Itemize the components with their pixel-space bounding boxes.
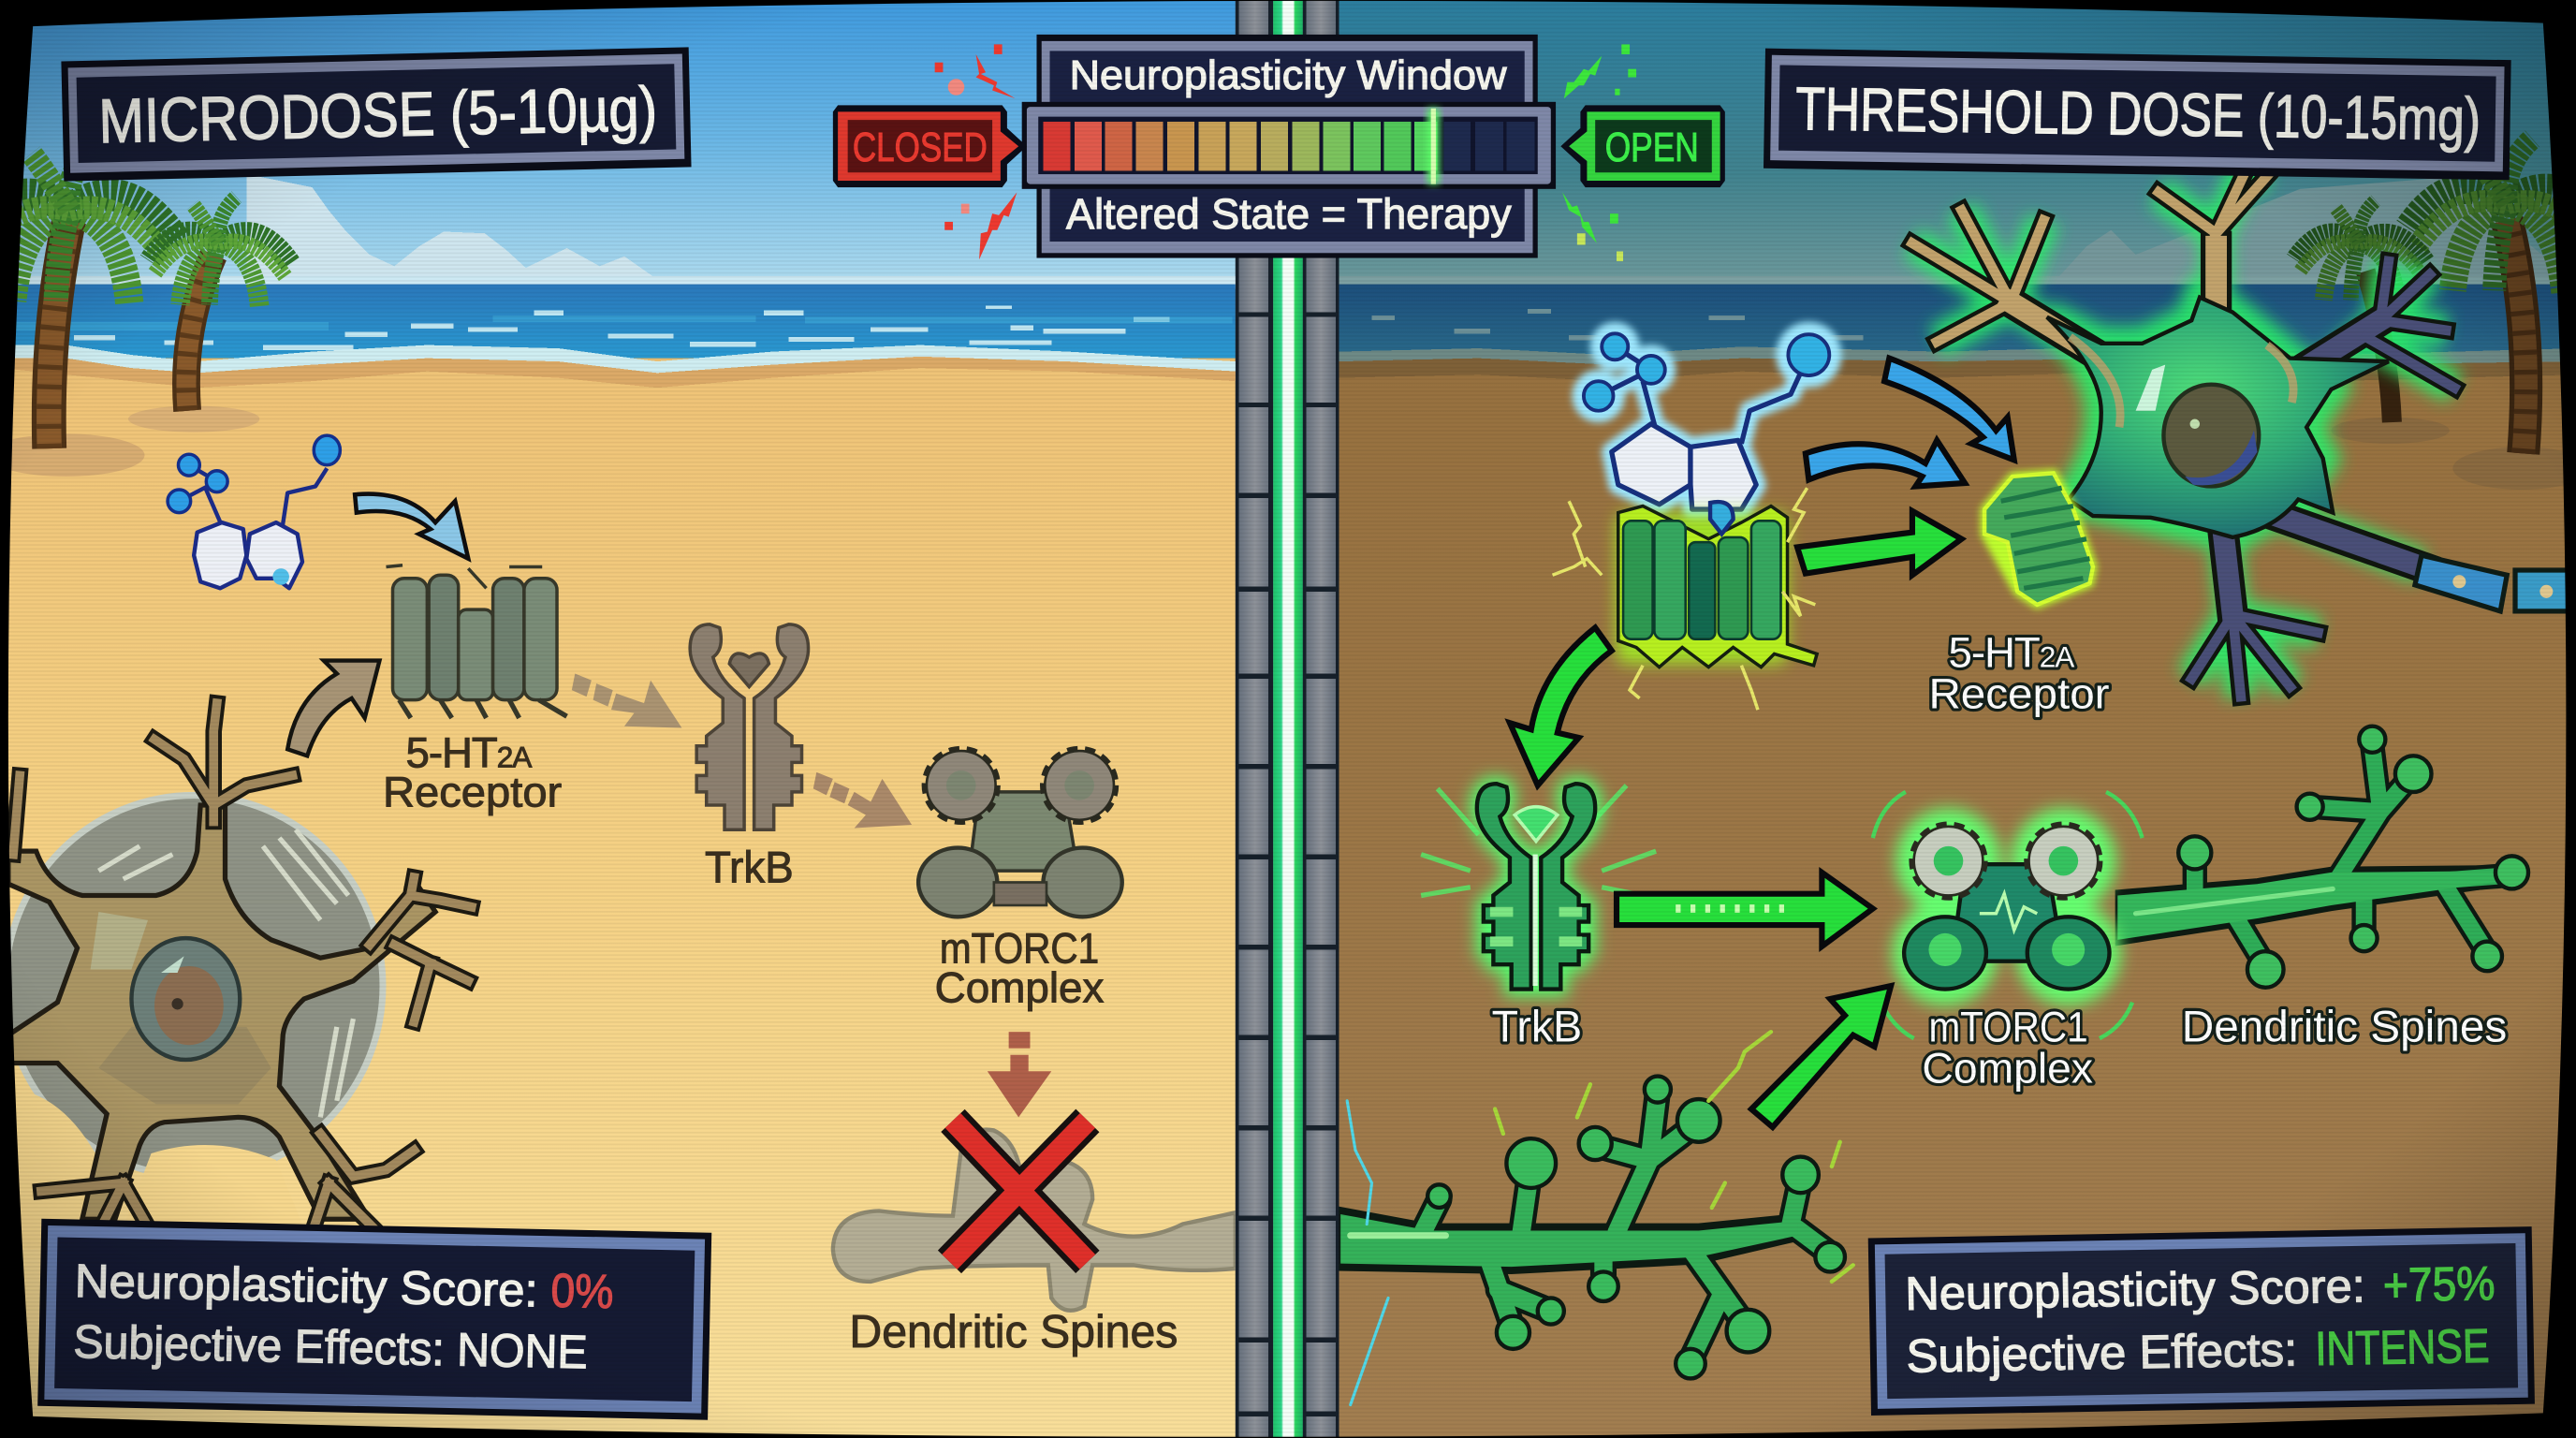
arrow: blue to spine receptor lower (1806, 440, 1965, 486)
arrow: receptor to TrkB curved (1510, 627, 1612, 785)
label: 5-HT2A receptor right: 5-HT2A (1949, 629, 2074, 677)
panel: microdose scores: Neuroplasticity Score: (74, 1255, 538, 1316)
caption box: altered state (1036, 184, 1538, 258)
axon segments (2415, 555, 2576, 611)
arrow: neuron to receptor (287, 661, 379, 756)
heading box: neuroplasticity window (1036, 35, 1538, 110)
label: TrkB left: TrkB (705, 843, 794, 892)
meter bar (1022, 102, 1556, 189)
panel: microdose scores: Subjective Effects: NONE (73, 1315, 588, 1378)
receptor: active 5-HT2A (1553, 488, 1817, 710)
label: 5-HT2A receptor right: Receptor (1928, 669, 2110, 717)
label: TrkB right: TrkB (1492, 1003, 1582, 1052)
panel: microdose (0, 0, 1236, 1438)
label: mTORC1 complex left: mTORC1 (940, 924, 1099, 972)
icon: TrkB active (1421, 784, 1656, 990)
panel: threshold scores (1868, 1226, 2535, 1416)
tag: open: OPEN (1605, 125, 1699, 170)
panel: neuroplasticity window meter (833, 35, 1725, 261)
molecule: psychedelic compound dim (168, 435, 340, 588)
receptor: inactive 5-HT2A (386, 565, 567, 718)
panel: microdose scores (37, 1219, 711, 1420)
value: intense: INTENSE (2315, 1319, 2490, 1375)
tag: closed (833, 105, 1027, 187)
panel: threshold scores: Subjective Effects: (1906, 1323, 2298, 1383)
label: mTORC1 complex right: Complex (1922, 1045, 2093, 1093)
neuron: dormant (0, 703, 472, 1249)
arrow: dashed TrkB to mTORC1 (813, 772, 912, 829)
panel: threshold dose (1339, 0, 2576, 1438)
value: zero percent: 0% (550, 1264, 614, 1318)
arrow: spines to mTORC1 diagonal (1751, 986, 1891, 1127)
label: dendritic spines right: Dendritic Spines (2182, 1003, 2507, 1052)
title: microdose: MICRODOSE (5-10µg) (98, 75, 658, 156)
arrow: faint ligand to receptor (355, 494, 468, 559)
arrow: dashed receptor to TrkB (572, 674, 681, 727)
title: microdose (61, 47, 692, 182)
label: 5-HT2A receptor left: 5-HT2A (406, 729, 532, 777)
panel: threshold scores: Neuroplasticity Score: (1905, 1259, 2365, 1320)
dendritic spines lower flourishing (1340, 1032, 1853, 1405)
palm tree right large (2409, 139, 2576, 453)
sparks: green (1562, 44, 1636, 261)
tag: open (1560, 105, 1725, 187)
icon: membrane receptor on neuron (1984, 473, 2093, 605)
label: mTORC1 complex right (1922, 1004, 2093, 1093)
icon: red X (949, 1121, 1088, 1262)
dendritic spines upper flourishing (2117, 726, 2528, 988)
label: mTORC1 complex left: Complex (935, 964, 1105, 1012)
icon: mTORC1 inactive (918, 751, 1122, 917)
icon: mTORC1 active (1873, 792, 2143, 1038)
beach background right (1339, 0, 2576, 1438)
palm tree small (150, 197, 290, 411)
label: mTORC1 complex left (935, 924, 1105, 1012)
label: dendritic spines left: Dendritic Spines (849, 1307, 1178, 1357)
value: plus 75 percent: +75% (2382, 1256, 2496, 1312)
meter marker (1427, 109, 1439, 184)
caption box: altered state: Altered State = Therapy (1066, 190, 1512, 238)
arrow: TrkB to mTORC1 (1617, 873, 1873, 946)
icon: TrkB inactive (690, 624, 809, 829)
divider: stone wall with light beam (1236, 0, 1339, 1438)
tag: closed: CLOSED (853, 125, 988, 170)
arrow: green to spine receptor (1797, 511, 1962, 575)
beach background left (0, 0, 1236, 1438)
label: mTORC1 complex right: mTORC1 (1928, 1004, 2088, 1051)
palm tree large (0, 142, 175, 448)
arrow: blue to spine receptor upper (1884, 359, 2014, 460)
heading box: neuroplasticity window: Neuroplasticity Window (1070, 52, 1507, 98)
label: 5-HT2A receptor left (383, 729, 562, 816)
dendritic spines atrophied (833, 1130, 1236, 1311)
molecule: psychedelic compound glowing (1582, 332, 1832, 509)
label: 5-HT2A receptor right (1928, 629, 2110, 717)
neuron: activated (1912, 174, 2576, 697)
title: threshold dose (1764, 49, 2511, 180)
palm tree right small (2295, 200, 2425, 422)
label: 5-HT2A receptor left: Receptor (383, 769, 562, 816)
sparks: red (935, 44, 1017, 259)
arrow: blocked signal downward (988, 1032, 1051, 1117)
